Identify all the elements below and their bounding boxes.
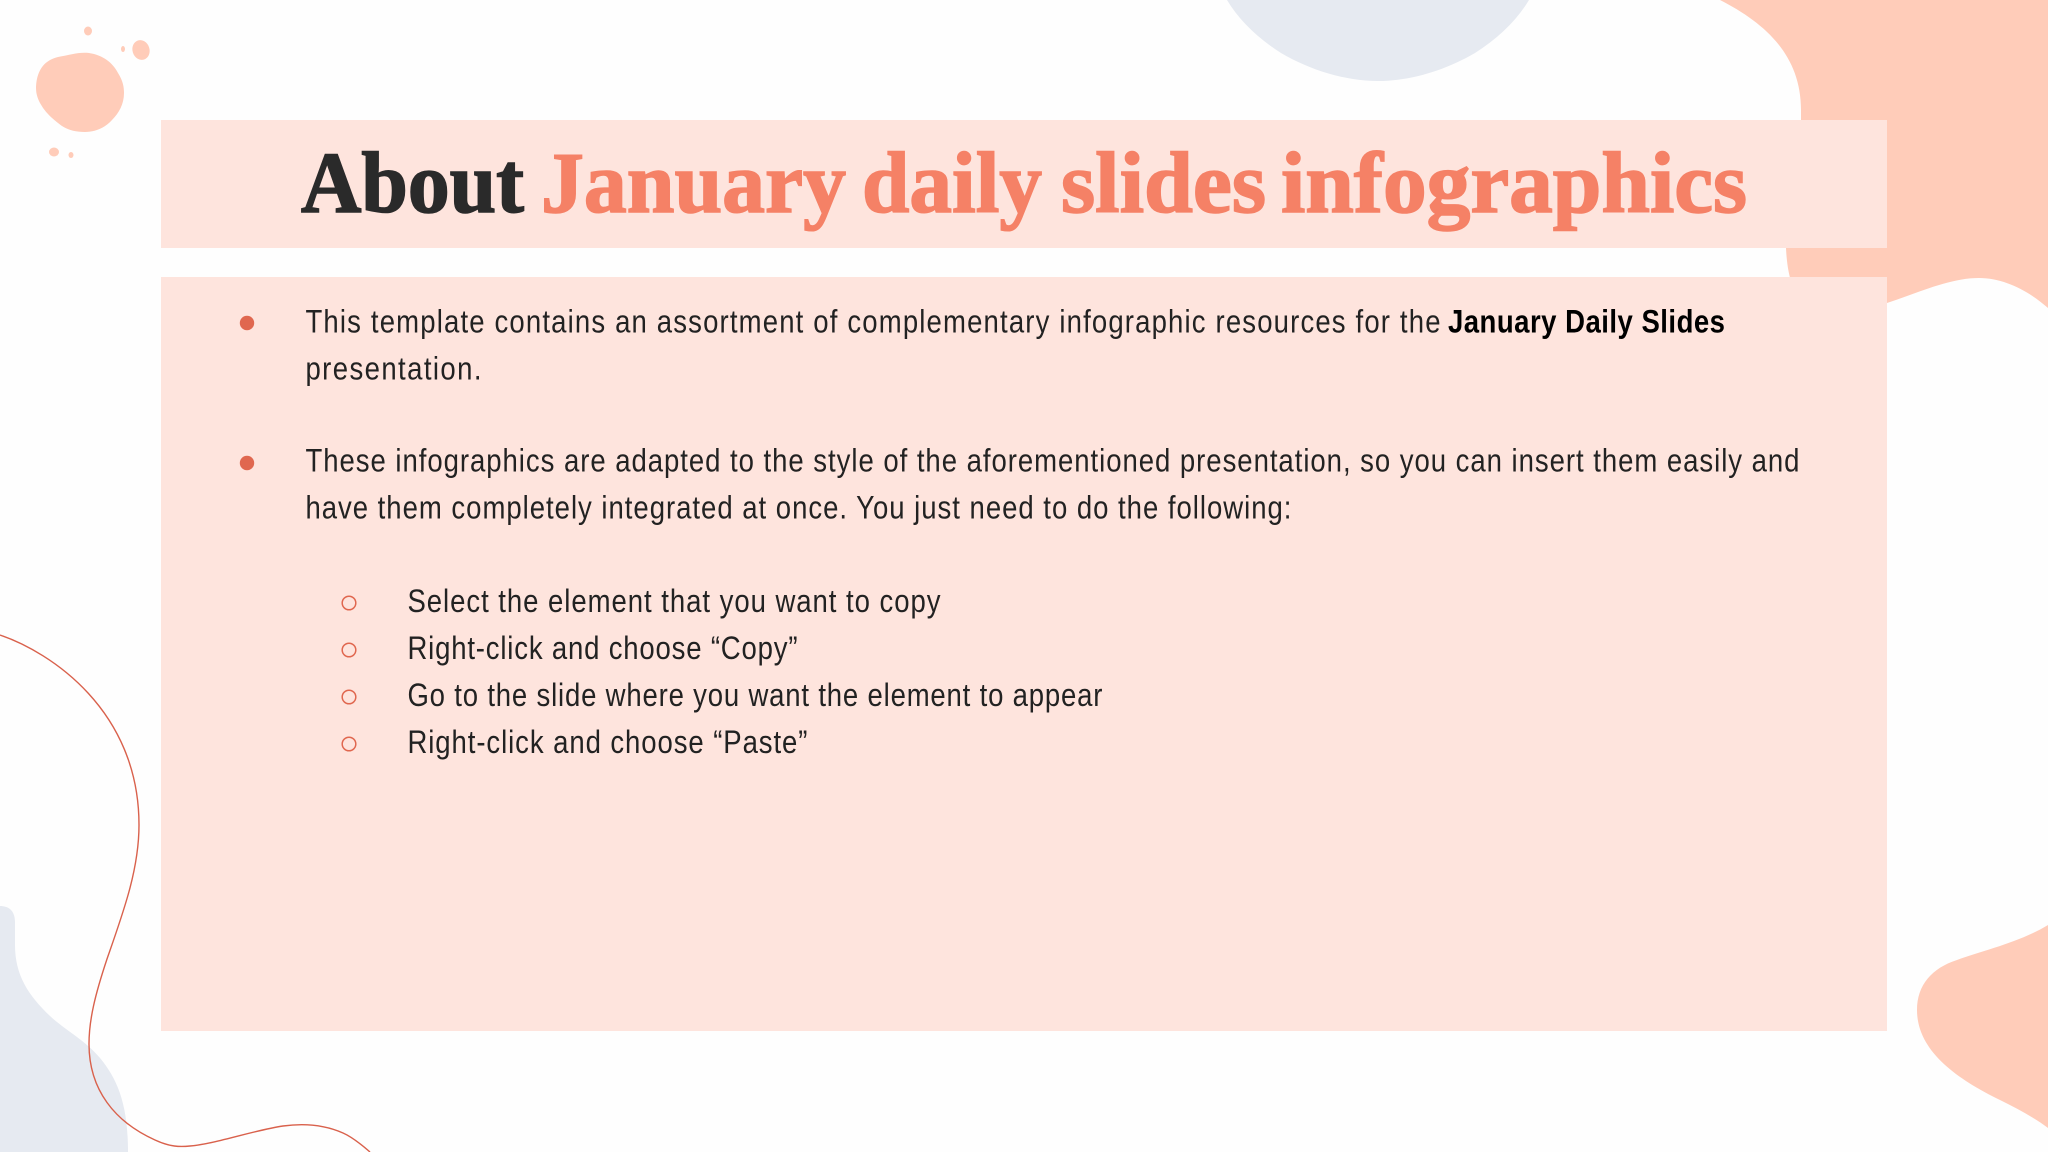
content panel [161, 277, 1887, 1031]
title: slides [1061, 134, 1266, 231]
bullet 1 [240, 305, 1725, 387]
bullet 1: January Daily Slides [1448, 305, 1725, 340]
bullet 2: have them completely integrated at once. You just need to do the following: [305, 491, 1291, 526]
sub-bullet list: Select the element that you want to copy [407, 584, 941, 620]
title: daily [862, 134, 1042, 231]
blob: bottom-left grey shape [0, 906, 128, 1152]
bullet 2 [240, 444, 1799, 526]
title: infographics [1281, 134, 1747, 231]
title: January [541, 134, 846, 231]
sub-bullet list: Go to the slide where you want the element to appear [407, 678, 1102, 714]
sub-bullet list: Right-click and choose “Paste” [407, 725, 807, 761]
bullet 2: These infographics are adapted to the style of the aforementioned presentation, so you can insert them easily and [305, 444, 1799, 479]
title [301, 134, 1747, 231]
bullet 1: presentation. [305, 352, 482, 387]
title bar [161, 120, 1887, 248]
blob: top-right peach shape [1720, 0, 2048, 320]
blob: top-left splash [36, 26, 152, 158]
blob: bottom-right peach shape [1917, 925, 2048, 1128]
blob: top grey semicircle [1227, 0, 1529, 81]
sub-bullet list [342, 584, 1102, 761]
title: About [301, 134, 524, 231]
decorative curved line [0, 635, 370, 1152]
bullet 1: This template contains an assortment of complementary infographic resources for the [305, 305, 1440, 340]
sub-bullet list: Right-click and choose “Copy” [407, 631, 797, 667]
